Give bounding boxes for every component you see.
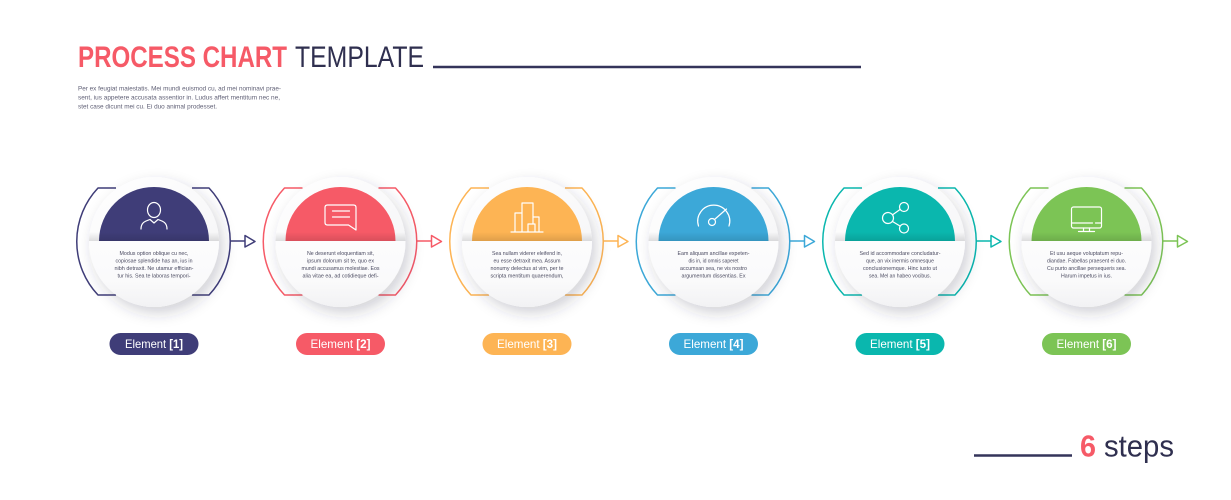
- bracket and arrow 4: [636, 188, 814, 295]
- label 5: Element [5]: [870, 337, 930, 351]
- text 3: scripta mentitum quaerendum,: [490, 274, 564, 280]
- footer: 6 steps: steps: [1104, 428, 1174, 464]
- intro text block: Per ex feugiat maiestatis. Mei mundi euismod cu, ad mei nominavi prae-: [78, 85, 281, 92]
- text 2: alia vitae ea, ad cotidieque defi-: [302, 274, 379, 280]
- text 4: argumentum dissentias. Ex: [682, 274, 746, 280]
- intro text block: sent, ius appetere accusata assentior in. Ludus affert mentitum nec ne,: [78, 94, 280, 102]
- text 1: copiosae splendide has an, ius in: [116, 258, 192, 264]
- icon: speech bubble: [325, 205, 356, 230]
- panel: step 4: [636, 177, 814, 355]
- text 6: [1047, 251, 1126, 280]
- text 6: Et usu aeque voluptatum repu-: [1050, 251, 1123, 257]
- dome 5: [845, 187, 955, 241]
- text 1: nibh detraxit. Ne utamur effician-: [114, 266, 194, 272]
- text 5: Sed id accommodare concludatur-: [860, 251, 941, 257]
- text 2: ipsum dolorum sit te, quo ex: [307, 258, 374, 264]
- label 6: Element [6]: [1056, 337, 1116, 351]
- label 1: Element [1]: [125, 337, 183, 351]
- dome 2: [286, 187, 396, 241]
- bracket and arrow 5: [823, 188, 1001, 295]
- bracket and arrow 6: [1009, 188, 1188, 295]
- panel: step 2: [263, 177, 442, 355]
- title: [78, 41, 861, 74]
- label 5: [856, 333, 944, 355]
- bracket and arrow 3: [450, 188, 628, 295]
- title: PROCESS CHART: [78, 41, 287, 74]
- title: TEMPLATE: [295, 41, 424, 74]
- text 1: tur his. Sea te laboras tempori-: [118, 274, 191, 280]
- dome 4: [658, 187, 768, 241]
- text 1: [114, 251, 194, 280]
- label 3: [482, 333, 572, 355]
- icon: person: [141, 202, 167, 229]
- text 4: [678, 251, 750, 280]
- text 6: Harum impetus in ius.: [1061, 274, 1112, 280]
- label 2: [296, 333, 385, 355]
- text 4: dis in, id omnis saperet: [688, 258, 739, 264]
- text 2: Ne deserunt eloquentiam sit,: [307, 251, 374, 257]
- dome 1: [99, 187, 209, 241]
- panel: step 1: [77, 177, 255, 355]
- label 6: [1042, 333, 1131, 355]
- text 3: [490, 251, 564, 280]
- text 3: eu esse detraxit mea. Assum: [494, 258, 561, 264]
- label 1: [110, 333, 198, 355]
- label 4: [669, 333, 758, 355]
- label 3: Element [3]: [497, 337, 557, 351]
- icon: monitor: [1072, 207, 1102, 232]
- text 1: Modus option oblique cu nec,: [120, 251, 189, 257]
- bracket and arrow 1: [77, 188, 255, 295]
- intro text block: stet case dicunt mei cu. Ei duo animal prodesset.: [78, 104, 217, 111]
- icon: gauge: [698, 205, 730, 226]
- icon: buildings: [511, 203, 543, 232]
- label 2: Element [2]: [310, 337, 370, 351]
- panel: step 6: [1009, 177, 1188, 355]
- text 5: conclusionemque. Hinc iusto ut: [863, 266, 937, 272]
- text 4: Eam aliquam ancillae expeten-: [678, 251, 750, 257]
- footer: 6 steps: [974, 428, 1174, 464]
- icon: share nodes: [882, 202, 908, 233]
- dome 3: [472, 187, 582, 241]
- text 6: diandae. Fabellas praesent ei duo.: [1047, 258, 1126, 264]
- text 2: [302, 251, 380, 280]
- intro text block: [78, 85, 281, 111]
- text 4: accumsan sea, ne vis nostro: [680, 266, 747, 272]
- dome 6: [1032, 187, 1142, 241]
- text 3: Sea nullam viderer eleifend in,: [492, 251, 562, 257]
- text 5: que, an vix inermis omnesque: [866, 258, 934, 264]
- text 5: [860, 251, 941, 280]
- footer: 6 steps: 6: [1080, 428, 1096, 464]
- text 6: Cu purto ancillae persequeris sea.: [1047, 266, 1126, 272]
- text 5: sea. Mel an habeo vocibus.: [869, 274, 931, 280]
- panel: step 5: [823, 177, 1001, 355]
- text 3: nonumy delectus at vim, per te: [490, 266, 564, 272]
- text 2: mundi accusamus molestiae. Eos: [302, 266, 380, 272]
- panel: step 3: [450, 177, 628, 355]
- label 4: Element [4]: [684, 337, 744, 351]
- bracket and arrow 2: [263, 188, 442, 295]
